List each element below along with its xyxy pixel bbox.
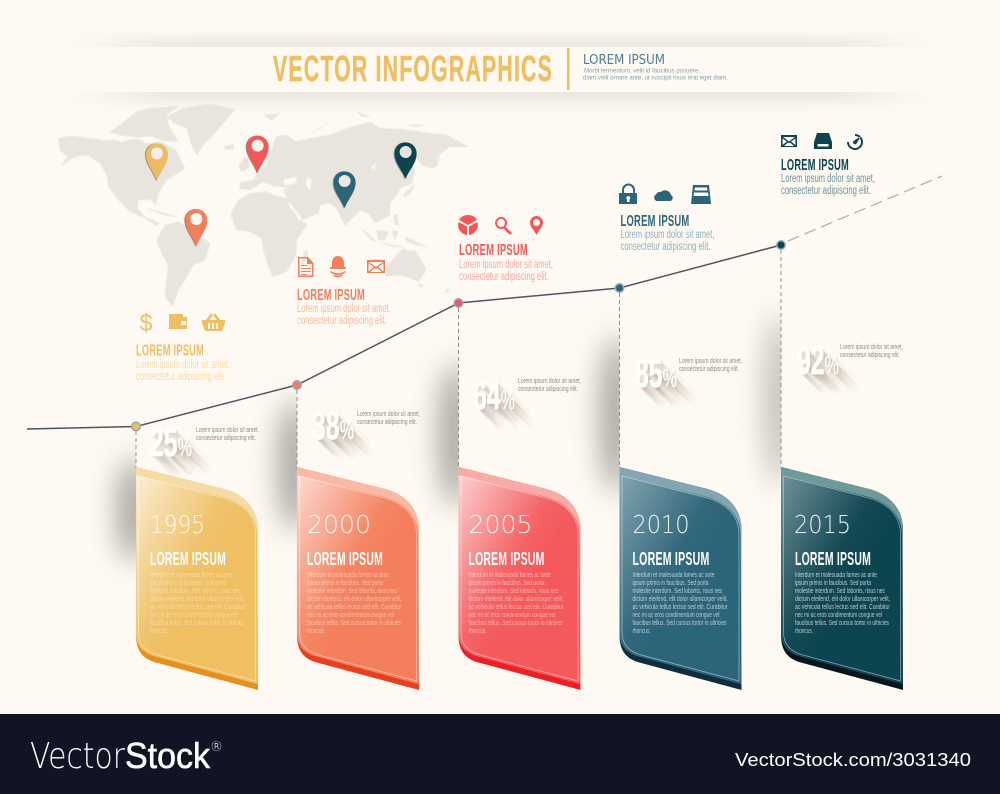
pin: europe bbox=[246, 136, 269, 173]
icon: bell bbox=[330, 256, 346, 277]
icon: wallet bbox=[169, 314, 187, 329]
percent: 38: 38% bbox=[312, 404, 354, 448]
watermark logo: ® bbox=[210, 740, 223, 755]
heading: LOREM IPSUM bbox=[459, 242, 528, 259]
body text bbox=[307, 572, 402, 635]
text bbox=[136, 359, 230, 383]
body text: faucibus tellus. Sed cursus tortor in ultricies bbox=[307, 620, 401, 627]
text bbox=[781, 173, 875, 197]
side note: 25%: consectetur adipiscing elit. bbox=[196, 433, 256, 442]
side note: 64%: consectetur adipiscing elit. bbox=[518, 384, 578, 393]
icon: mail bbox=[367, 260, 385, 273]
pin: east asia bbox=[394, 142, 417, 179]
heading: LOREM IPSUM bbox=[136, 342, 204, 360]
body text: nec mi ac eros condimentum congue vel bbox=[307, 612, 394, 619]
body text: ipsum primis in faucibus. Sed porta bbox=[795, 580, 871, 587]
body text: dictum eleifend, elit dolor ullamcorper velit, bbox=[150, 596, 245, 603]
body text: molestie interdum. Sed lobortis, risus nec bbox=[307, 588, 397, 595]
body text: molestie interdum. Sed lobortis, risus nec bbox=[632, 588, 723, 595]
year: 2000 bbox=[307, 510, 371, 539]
body text: dictum eleifend, elit dolor ullamcorper velit, bbox=[795, 596, 890, 603]
body text: rhoncus. bbox=[307, 628, 325, 635]
header description bbox=[583, 68, 728, 82]
body text: Interdum et malesuada fames ac ante bbox=[795, 572, 877, 579]
body text: ipsum primis in faucibus. Sed porta bbox=[468, 580, 545, 587]
year: 2010 bbox=[632, 510, 690, 539]
body text: ipsum primis in faucibus. Sed porta bbox=[632, 580, 709, 587]
pin: asia bbox=[333, 171, 356, 208]
text: Lorem ipsum dolor sit amet, bbox=[781, 173, 875, 185]
side note: 92%: consectetur adipiscing elit. bbox=[840, 350, 900, 359]
side note: 25%: Lorem ipsum dolor sit amet, bbox=[196, 425, 259, 434]
text: consectetur adipiscing elit. bbox=[297, 315, 387, 327]
heading: LOREM IPSUM bbox=[297, 287, 365, 304]
year: 2015 bbox=[794, 510, 851, 539]
body text: dictum eleifend, elit dolor ullamcorper velit, bbox=[632, 596, 728, 603]
title: VECTOR INFOGRAPHICS bbox=[273, 48, 553, 89]
pin: south america bbox=[184, 209, 207, 247]
percent: 85: 85% bbox=[635, 352, 677, 396]
icon: dollar: $ bbox=[140, 310, 152, 337]
body text: ac vehicula tellus lectus sed elit. Curabitur bbox=[150, 604, 245, 611]
callout: 2010 bbox=[619, 184, 714, 253]
text: Lorem ipsum dolor sit amet, bbox=[136, 359, 230, 371]
panel: 2010 bbox=[620, 467, 742, 690]
callout: 2000 bbox=[297, 256, 391, 327]
body text bbox=[632, 572, 728, 635]
watermark bar bbox=[0, 714, 1000, 794]
body text: nec mi ac eros condimentum congue vel bbox=[150, 612, 237, 619]
heading: LOREM IPSUM bbox=[468, 549, 544, 569]
text bbox=[297, 303, 391, 327]
panel: 2000 bbox=[297, 467, 419, 690]
side note: 92% bbox=[840, 342, 903, 359]
header description: diam velit ornare ante, ut suscipit risus erat eget diam. bbox=[583, 74, 728, 82]
body text: faucibus tellus. Sed cursus tortor in ultricies bbox=[632, 620, 727, 627]
body text bbox=[468, 572, 564, 635]
body text: molestie interdum. Sed lobortis, risus nec bbox=[795, 588, 885, 595]
panel: 1995 bbox=[136, 467, 258, 690]
percent: 64: 64% bbox=[473, 374, 515, 418]
side note: 85% bbox=[679, 356, 742, 373]
icon: document bbox=[298, 257, 314, 277]
header description: Morbi fermentum, velit id faucibus posuere, bbox=[584, 68, 700, 74]
text: consectetur adipiscing elit. bbox=[620, 241, 710, 253]
icon: lock bbox=[619, 184, 637, 204]
callout: 1995 bbox=[136, 310, 230, 383]
body text: nec mi ac eros condimentum congue vel bbox=[632, 612, 720, 619]
column shadows bbox=[117, 315, 793, 562]
text: consectetur adipiscing elit. bbox=[781, 185, 871, 197]
body text: ipsum primis in faucibus. Sed porta bbox=[150, 580, 226, 587]
body text: faucibus tellus. Sed cursus tortor in ultricies bbox=[795, 620, 889, 627]
title divider bbox=[567, 48, 570, 90]
icon: location bbox=[530, 216, 543, 235]
panel: 2015 bbox=[781, 467, 903, 690]
icon: mail bbox=[781, 135, 797, 147]
side note: 64%: Lorem ipsum dolor sit amet, bbox=[518, 376, 581, 385]
watermark url: VectorStock.com/3031340 bbox=[735, 750, 971, 770]
body text: Interdum et malesuada fames ac ante bbox=[150, 572, 232, 579]
body text: ipsum primis in faucibus. Sed porta bbox=[307, 580, 383, 587]
point: 2000 bbox=[293, 381, 301, 389]
percent: 92: 92% bbox=[797, 339, 839, 383]
heading: LOREM IPSUM bbox=[632, 549, 710, 569]
heading: LOREM IPSUM bbox=[795, 549, 871, 569]
trend line bbox=[27, 176, 942, 429]
icon: drive bbox=[814, 133, 832, 149]
text bbox=[620, 229, 714, 253]
watermark logo: Stock bbox=[125, 735, 211, 776]
side note: 38% bbox=[357, 409, 420, 426]
body text: rhoncus. bbox=[795, 628, 813, 635]
text: consectetur adipiscing elit. bbox=[459, 271, 549, 283]
body text: nec mi ac eros condimentum congue vel bbox=[795, 612, 882, 619]
side note: 92%: Lorem ipsum dolor sit amet, bbox=[840, 342, 903, 351]
year: 1995 bbox=[150, 510, 205, 539]
side note: 25% bbox=[196, 425, 259, 442]
body text bbox=[795, 572, 890, 635]
body text: ac vehicula tellus lectus sed elit. Curabitur bbox=[795, 604, 890, 611]
body text: molestie interdum. Sed lobortis, risus nec bbox=[150, 588, 240, 595]
body text: rhoncus. bbox=[632, 628, 651, 635]
side note: 64% bbox=[518, 376, 581, 393]
body text: rhoncus. bbox=[468, 628, 487, 635]
point: 1995 bbox=[132, 422, 140, 431]
body text: ac vehicula tellus lectus sed elit. Curabitur bbox=[468, 604, 564, 611]
callout: 2005 bbox=[458, 215, 553, 283]
body text: ac vehicula tellus lectus sed elit. Curabitur bbox=[632, 604, 728, 611]
side note: 38%: Lorem ipsum dolor sit amet, bbox=[357, 409, 420, 418]
text: Lorem ipsum dolor sit amet, bbox=[459, 259, 553, 271]
header banner bbox=[0, 38, 1000, 102]
world map bbox=[58, 104, 468, 307]
body text: Interdum et malesuada fames ac ante bbox=[307, 572, 389, 579]
icon: cube bbox=[458, 215, 478, 235]
icon: gauge bbox=[847, 134, 863, 150]
body text: faucibus tellus. Sed cursus tortor in ultricies bbox=[150, 620, 244, 627]
body text: Interdum et malesuada fames ac ante bbox=[468, 572, 551, 579]
body text: dictum eleifend, elit dolor ullamcorper velit, bbox=[307, 596, 402, 603]
body text: molestie interdum. Sed lobortis, risus nec bbox=[468, 588, 559, 595]
panel: 2005 bbox=[458, 467, 580, 690]
watermark logo bbox=[30, 735, 223, 777]
heading: LOREM IPSUM bbox=[150, 549, 226, 569]
body text: rhoncus. bbox=[150, 628, 168, 635]
point: 2010 bbox=[615, 284, 624, 292]
body text: Interdum et malesuada fames ac ante bbox=[632, 572, 715, 579]
body text: dictum eleifend, elit dolor ullamcorper velit, bbox=[468, 596, 564, 603]
point: 2015 bbox=[777, 241, 785, 249]
percent: 25: 25% bbox=[150, 421, 192, 465]
text: consectetur adipiscing elit. bbox=[136, 371, 226, 383]
icon: magnifier bbox=[495, 217, 512, 235]
text: Lorem ipsum dolor sit amet, bbox=[297, 303, 391, 315]
text bbox=[459, 259, 553, 283]
watermark logo: Vector bbox=[30, 736, 125, 777]
dashed drop lines bbox=[136, 250, 781, 468]
heading: LOREM IPSUM bbox=[781, 157, 849, 174]
year: 2005 bbox=[468, 510, 532, 539]
side note: 85%: Lorem ipsum dolor sit amet, bbox=[679, 356, 742, 365]
side note: 85%: consectetur adipiscing elit. bbox=[679, 364, 739, 373]
body text: ac vehicula tellus lectus sed elit. Curabitur bbox=[307, 604, 402, 611]
pin: north america bbox=[145, 143, 168, 181]
body text: faucibus tellus. Sed cursus tortor in ultricies bbox=[468, 620, 563, 627]
header subtitle: LOREM IPSUM bbox=[583, 53, 665, 68]
icon: cloud bbox=[654, 190, 673, 201]
body text bbox=[150, 572, 245, 635]
point: 2005 bbox=[454, 299, 463, 307]
map pins bbox=[145, 136, 417, 247]
icon: tray bbox=[691, 185, 711, 204]
text: Lorem ipsum dolor sit amet, bbox=[620, 229, 714, 241]
body text: nec mi ac eros condimentum congue vel bbox=[468, 612, 556, 619]
heading: LOREM IPSUM bbox=[307, 549, 383, 569]
callout: 2015 bbox=[781, 133, 875, 197]
side note: 38%: consectetur adipiscing elit. bbox=[357, 417, 417, 426]
heading: LOREM IPSUM bbox=[620, 213, 690, 230]
icon: basket bbox=[202, 313, 225, 331]
